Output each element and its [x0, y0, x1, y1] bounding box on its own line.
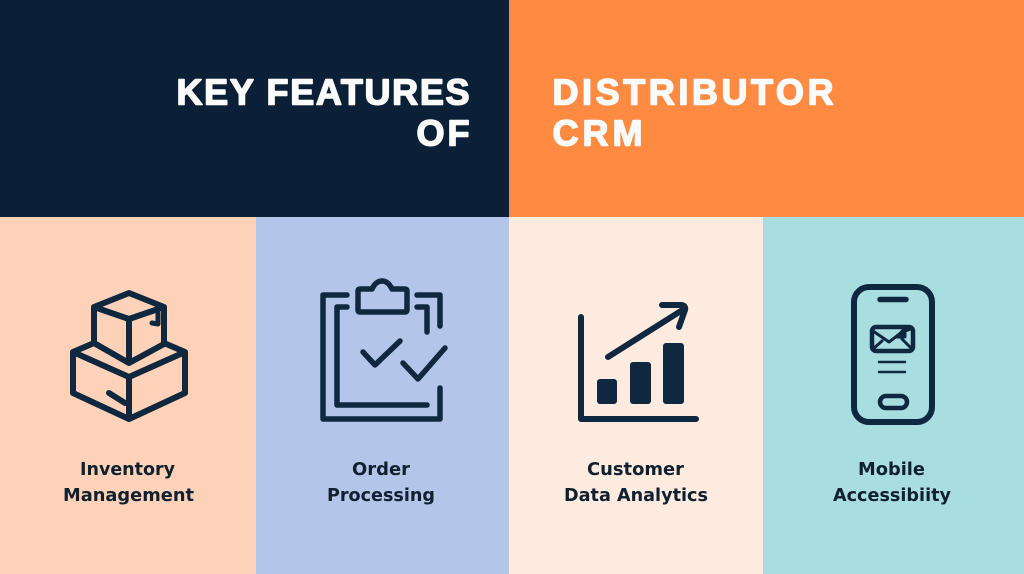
- label: inventory management: Management: [63, 485, 194, 506]
- label: customer data analytics: Data Analytics: [564, 485, 708, 506]
- heading: key features of: OF: [416, 112, 470, 154]
- label: mobile accessibility: Mobile: [858, 459, 925, 480]
- icon: stacked boxes: [73, 293, 185, 419]
- label: customer data analytics: Customer: [587, 459, 684, 480]
- label: order processing: Processing: [327, 485, 435, 506]
- panel: customer data analytics: [509, 217, 763, 574]
- heading: distributor crm: [552, 72, 834, 154]
- panel: title left navy: [0, 0, 509, 217]
- icon: phone with envelope: [854, 287, 932, 422]
- icon: clipboard with checks: [323, 281, 445, 419]
- panel: title right orange: [509, 0, 1024, 217]
- label: mobile accessibility: Accessibiity: [833, 485, 951, 506]
- icon: growth chart: [581, 305, 696, 419]
- label: order processing: Order: [352, 459, 410, 480]
- label: order processing: [327, 459, 435, 506]
- heading: key features of: [176, 72, 470, 154]
- heading: distributor crm: CRM: [552, 112, 642, 154]
- label: inventory management: [63, 459, 194, 506]
- label: customer data analytics: [564, 459, 708, 506]
- panel: inventory management: [0, 217, 256, 574]
- panel: order processing: [256, 217, 509, 574]
- heading: distributor crm: DISTRIBUTOR: [552, 72, 834, 112]
- heading: key features of: KEY FEATURES: [176, 72, 470, 112]
- label: inventory management: Inventory: [80, 459, 175, 480]
- panel: mobile accessibility: [763, 217, 1024, 574]
- label: mobile accessibility: [833, 459, 951, 506]
